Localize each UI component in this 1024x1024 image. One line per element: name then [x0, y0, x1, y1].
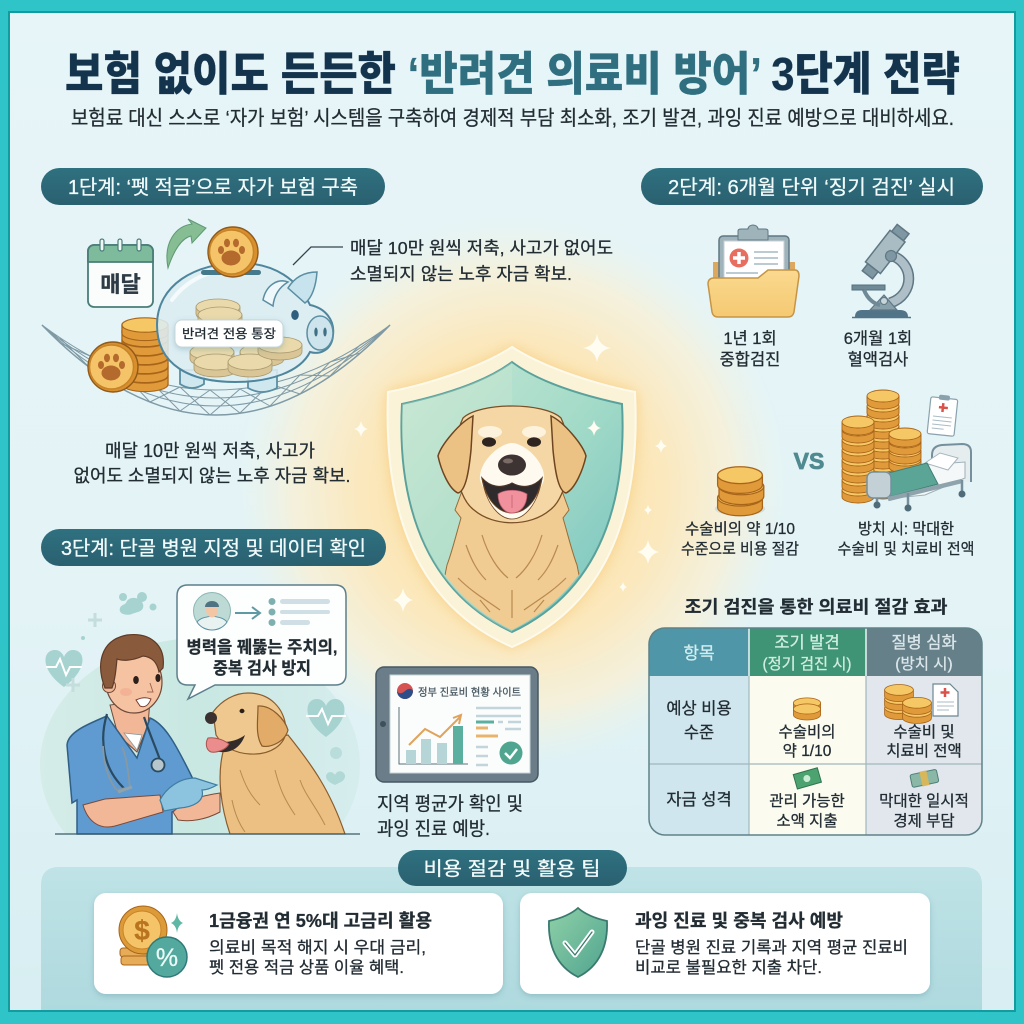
card: prevent overtreatment: 단골 병원 진료 기록과 지역 평균 진료비	[635, 938, 908, 957]
vs label: VS	[794, 448, 824, 474]
illustration: vet and dog	[67, 635, 345, 834]
icon: dollar coin and percent	[119, 906, 187, 977]
heading: step 2: 2단계: 6개월 단위 ‘징기 검진’ 실시	[668, 176, 955, 199]
icon: dollar coin and percent: $	[134, 915, 150, 946]
label: annual checkup: 중합검진	[720, 350, 780, 369]
icon: calendar monthly: 매달	[100, 272, 141, 297]
description text: 매달 10만 원씩 저축, 사고가	[105, 441, 315, 461]
panel: step 3 vet	[40, 529, 539, 838]
card: prevent overtreatment: 비교로 불필요한 지출 차단.	[635, 958, 822, 977]
icon: piggy bank	[157, 263, 333, 392]
icon: tablet with price chart	[376, 667, 538, 782]
card: high interest: 펫 전용 적금 상품 이율 혜택.	[209, 958, 404, 977]
table title: 조기 검진을 통한 의료비 절감 효과	[684, 597, 948, 617]
icon: arrow	[235, 607, 260, 619]
heading: step 1	[41, 168, 385, 205]
callout text: 매달 10만 원씩 저축, 사고가 없어도	[350, 238, 613, 258]
icon: paw coin dropping in	[208, 227, 258, 277]
label: annual checkup	[720, 329, 780, 369]
comparison table	[649, 597, 982, 835]
speech bubble	[177, 585, 346, 699]
speech bubble: 병력을 꿰뚫는 주치의,	[186, 638, 338, 657]
table header: 항목	[683, 644, 715, 663]
row: fund type	[666, 768, 969, 830]
label: half-year blood test: 혈액검사	[848, 350, 908, 369]
table header: 조기 발견	[774, 633, 840, 652]
label: pet account: 반려견 전용 통장	[182, 327, 277, 341]
icon: green arrow	[167, 219, 206, 268]
label: pet account	[175, 320, 283, 347]
icon: large paw coin	[88, 342, 138, 392]
illustration background	[40, 640, 360, 834]
tablet caption: 지역 평균가 확인 및	[377, 793, 523, 815]
icon: golden retriever portrait	[438, 406, 586, 640]
title: 보험 없이도 든든한 ‘반려견 의료비 방어’ 3단계 전략	[65, 48, 960, 100]
row: expected cost: 치료비 전액	[886, 742, 962, 760]
tablet caption: 과잉 진료 예방.	[377, 818, 490, 840]
icon: large coin stacks and hospital bed	[842, 390, 971, 512]
icon: small coin stack	[715, 467, 765, 516]
icon: coin stack	[122, 318, 168, 392]
icon: dollar coin and percent: %	[156, 944, 178, 972]
icon: calendar monthly	[88, 239, 153, 307]
central shield with dog	[388, 347, 636, 647]
card: prevent overtreatment: 과잉 진료 및 중복 검사 예방	[635, 911, 843, 931]
baseline	[55, 833, 360, 835]
card: prevent overtreatment	[520, 893, 930, 994]
callout text	[350, 238, 613, 284]
tablet caption	[377, 793, 523, 840]
subtitle: 보험료 대신 스스로 ‘자가 보험’ 시스템을 구축하여 경제적 부담 최소화, 조기 발견, 과잉 진료 예방으로 대비하세요.	[71, 107, 954, 130]
icon: shield check	[549, 908, 607, 977]
table header: 질병 심화	[891, 633, 957, 652]
heading: tips: 비용 절감 및 활용 팁	[424, 858, 600, 880]
row: fund type: 막대한 일시적	[879, 792, 969, 810]
row: fund type: 소액 지출	[776, 812, 838, 830]
speech bubble: 중복 검사 방지	[213, 659, 311, 678]
row: fund type: 자금 성격	[666, 790, 732, 809]
label: neglect cost	[838, 520, 974, 558]
card: high interest: 1금융권 연 5%대 고금리 활용	[209, 911, 432, 931]
table header: (방치 시)	[895, 655, 953, 673]
table header	[683, 633, 957, 673]
table header: (정기 검진 시)	[762, 655, 852, 673]
heading: step 2	[641, 168, 983, 205]
heading: step 1: 1단계: ‘펫 적금’으로 자가 보험 구축	[68, 176, 358, 199]
icon: folder with clipboard	[708, 225, 799, 317]
label: neglect cost: 방치 시: 막대한	[858, 520, 954, 538]
icon: tablet with price chart: 정부 진료비 현황 사이트	[418, 686, 521, 698]
sparkles around shield	[354, 334, 667, 612]
card: high interest	[94, 893, 503, 994]
label: early detection cost	[681, 520, 799, 558]
panel: step 2 checkups	[641, 168, 983, 558]
description text	[74, 441, 350, 486]
label: half-year blood test	[844, 329, 912, 369]
label: early detection cost: 수술비의 약 1/10	[685, 520, 795, 538]
icon: microscope	[852, 223, 911, 318]
row: expected cost: 수술비 및	[893, 723, 955, 741]
icon: safety net	[42, 325, 390, 415]
row: fund type: 경제 부담	[893, 812, 955, 830]
panel: savings tips	[41, 850, 982, 1011]
icon: doctor avatar	[194, 592, 230, 630]
row: expected cost: 약 1/10	[783, 742, 832, 760]
row: expected cost: 수술비의	[778, 723, 836, 741]
label: early detection cost: 수준으로 비용 절감	[681, 540, 799, 558]
table grid	[649, 628, 982, 835]
heading: step 3: 3단계: 단골 병원 지정 및 데이터 확인	[61, 537, 366, 560]
warm glow behind shield	[200, 200, 840, 840]
heading: step 3	[41, 529, 386, 566]
row: fund type: 관리 가능한	[769, 792, 845, 810]
callout text: 소멸되지 않는 노후 자금 확보.	[350, 264, 572, 284]
label: half-year blood test: 6개월 1회	[844, 329, 912, 348]
label: annual checkup: 1년 1회	[723, 329, 777, 348]
row: expected cost: 수준	[684, 724, 714, 742]
icon: medical chart	[927, 394, 958, 436]
heading: tips	[398, 850, 627, 886]
row: expected cost	[666, 684, 962, 760]
callout line	[293, 247, 343, 265]
icon: record list	[268, 598, 330, 626]
row: expected cost: 예상 비용	[666, 699, 732, 718]
description text: 없어도 소멸되지 않는 노후 자금 확보.	[74, 466, 350, 486]
label: neglect cost: 수술비 및 치료비 전액	[838, 540, 974, 558]
icon: decorations	[45, 592, 345, 785]
panel: step 1 savings	[41, 168, 613, 486]
card: high interest: 의료비 목적 해지 시 우대 금리,	[209, 938, 426, 957]
